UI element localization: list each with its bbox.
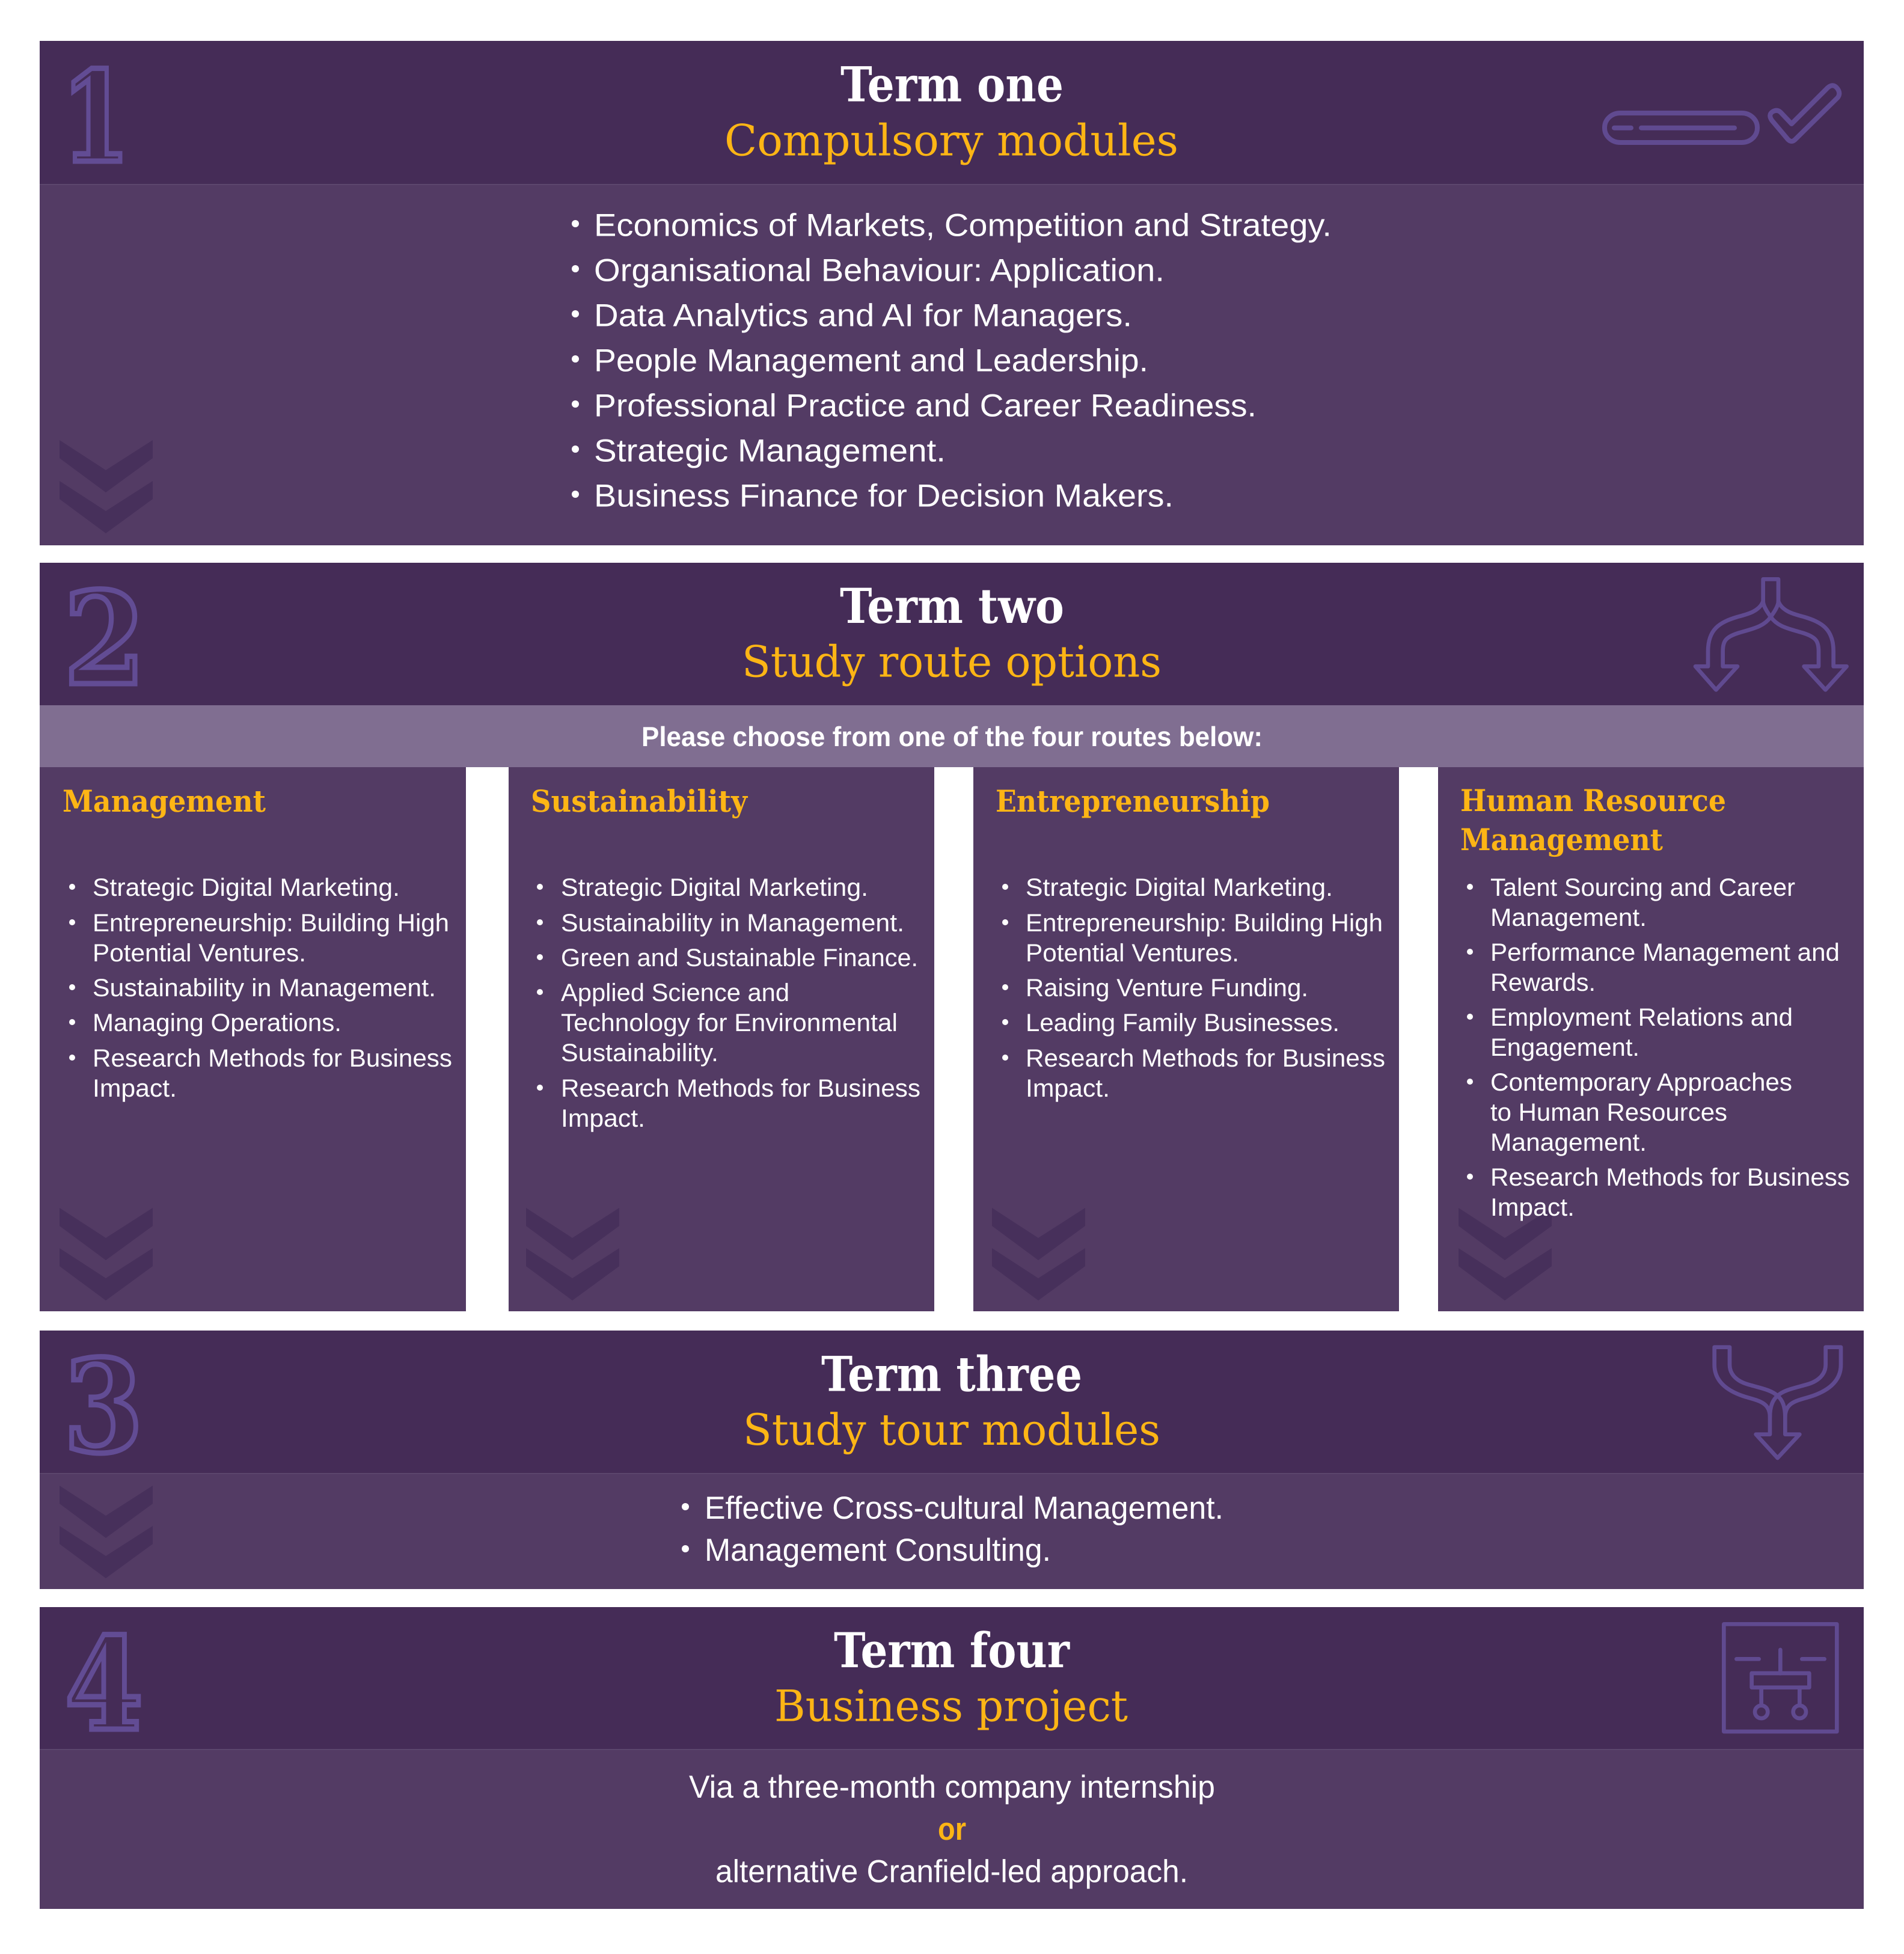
panel: term three <box>40 1331 1864 1589</box>
list: compulsory modules: People Management and Leadership. <box>594 343 1148 379</box>
icon: splitting arrows <box>1695 579 1847 690</box>
list: human resource modules: Engagement. <box>1490 1033 1639 1061</box>
list: human resource modules: Employment Relations and <box>1490 1003 1793 1031</box>
number 1: 1 <box>61 44 130 191</box>
text block: internship options <box>689 1769 1215 1890</box>
subtitle: Compulsory modules: Compulsory modules <box>724 115 1178 166</box>
list: sustainability modules: Strategic Digital Marketing. <box>561 873 868 901</box>
list: human resource modules: Talent Sourcing and Career <box>1490 873 1795 901</box>
list: human resource modules: Performance Management and <box>1490 938 1840 966</box>
chevrons: human resource management <box>1459 1208 1552 1300</box>
heading: Human Resource Management <box>1460 783 1726 857</box>
heading: Sustainability: Sustainability <box>531 783 748 819</box>
list: management modules <box>69 873 452 1102</box>
chevrons: sustainability <box>526 1208 619 1300</box>
header band: term one <box>40 41 1864 185</box>
column: Sustainability <box>509 767 934 1311</box>
heading: Human Resource Management: Management <box>1460 822 1663 857</box>
list: study tour modules: Management Consulting. <box>705 1533 1051 1568</box>
list: management modules: Managing Operations. <box>93 1008 341 1037</box>
list: sustainability modules: Applied Science and <box>561 978 789 1006</box>
list: sustainability modules: Sustainability. <box>561 1038 718 1067</box>
list: human resource modules: Research Methods for Business <box>1490 1163 1850 1191</box>
chevrons: entrepreneurship <box>992 1208 1085 1300</box>
panel: term one <box>40 41 1864 545</box>
list: sustainability modules <box>537 873 920 1132</box>
list: sustainability modules: Sustainability in Management. <box>561 908 904 937</box>
list: entrepreneurship modules: Research Methods for Business <box>1026 1044 1385 1072</box>
list: sustainability modules: Research Methods for Business <box>561 1074 920 1102</box>
panel: term four <box>40 1607 1864 1909</box>
instruction strip: Please choose from one of the four routes below: <box>641 721 1263 752</box>
list: compulsory modules: Strategic Management. <box>594 433 946 469</box>
list: sustainability modules: Impact. <box>561 1104 645 1132</box>
title: Term three: Term three <box>821 1346 1082 1402</box>
heading: Human Resource Management: Human Resource <box>1460 783 1726 818</box>
header band: term three <box>40 1331 1864 1474</box>
list: compulsory modules: Economics of Markets, Competition and Strategy. <box>594 208 1332 243</box>
list: entrepreneurship modules: Leading Family Businesses. <box>1026 1008 1339 1037</box>
list: management modules: Research Methods for Business <box>93 1044 452 1072</box>
instruction strip <box>40 705 1864 767</box>
number 2: 2 <box>64 564 145 714</box>
list: management modules: Entrepreneurship: Building High <box>93 908 449 937</box>
list: human resource modules <box>1467 873 1850 1221</box>
list: sustainability modules: Technology for Environmental <box>561 1008 898 1037</box>
column: Management <box>40 767 466 1311</box>
text block: internship options: alternative Cranfield-led approach. <box>715 1854 1188 1890</box>
list: entrepreneurship modules <box>1002 873 1385 1102</box>
list: compulsory modules: Professional Practice and Career Readiness. <box>594 388 1257 424</box>
list: study tour modules <box>682 1490 1223 1568</box>
subtitle: Study tour modules: Study tour modules <box>743 1404 1160 1455</box>
title: Term one: Term one <box>840 57 1064 113</box>
header band: term two <box>40 563 1864 705</box>
panel: term two <box>40 563 1864 1311</box>
list: management modules: Strategic Digital Marketing. <box>93 873 400 901</box>
list: compulsory modules: Organisational Behaviour: Application. <box>594 253 1165 289</box>
icon: checklist bar with tick <box>1605 85 1839 142</box>
column: Human Resource Management <box>1438 767 1864 1311</box>
list: entrepreneurship modules: Impact. <box>1026 1074 1110 1102</box>
list: sustainability modules: Green and Sustainable Finance. <box>561 943 918 972</box>
list: entrepreneurship modules: Strategic Digital Marketing. <box>1026 873 1333 901</box>
number 4: 4 <box>65 1609 143 1759</box>
text block: internship options: Via a three-month company internship <box>689 1769 1215 1805</box>
chevrons: term three <box>60 1486 153 1578</box>
heading: Management: Management <box>63 783 266 819</box>
list: human resource modules: Management. <box>1490 1128 1647 1156</box>
list: entrepreneurship modules: Potential Ventures. <box>1026 939 1239 967</box>
chevrons: management <box>60 1208 153 1300</box>
subtitle: Study route options: Study route options <box>742 636 1162 687</box>
header band: term four <box>40 1607 1864 1750</box>
list: entrepreneurship modules: Entrepreneurship: Building High <box>1026 908 1383 937</box>
list: management modules: Sustainability in Management. <box>93 973 436 1002</box>
icon: merging arrows <box>1715 1347 1841 1458</box>
title: Term four: Term four <box>834 1622 1070 1679</box>
list: study tour modules: Effective Cross-cultural Management. <box>705 1490 1223 1526</box>
list: human resource modules: Contemporary Approaches <box>1490 1068 1792 1096</box>
list: entrepreneurship modules: Raising Venture Funding. <box>1026 973 1308 1002</box>
column: Entrepreneurship <box>973 767 1399 1311</box>
list: human resource modules: Rewards. <box>1490 968 1596 996</box>
heading: Entrepreneurship: Entrepreneurship <box>996 783 1270 819</box>
list: management modules: Potential Ventures. <box>93 939 306 967</box>
list: management modules: Impact. <box>93 1074 177 1102</box>
chevrons: term one <box>60 440 153 533</box>
list: human resource modules: to Human Resources <box>1490 1098 1727 1126</box>
list: human resource modules: Impact. <box>1490 1193 1575 1221</box>
list: human resource modules: Management. <box>1490 903 1647 931</box>
list: compulsory modules: Data Analytics and AI for Managers. <box>594 298 1132 334</box>
number 3: 3 <box>64 1332 143 1481</box>
subtitle: Business project: Business project <box>774 1681 1128 1732</box>
title: Term two: Term two <box>840 578 1064 634</box>
text block: internship options: or <box>938 1812 966 1847</box>
icon: project diagram <box>1724 1624 1837 1732</box>
list: compulsory modules <box>572 208 1332 514</box>
list: compulsory modules: Business Finance for Decision Makers. <box>594 479 1174 514</box>
